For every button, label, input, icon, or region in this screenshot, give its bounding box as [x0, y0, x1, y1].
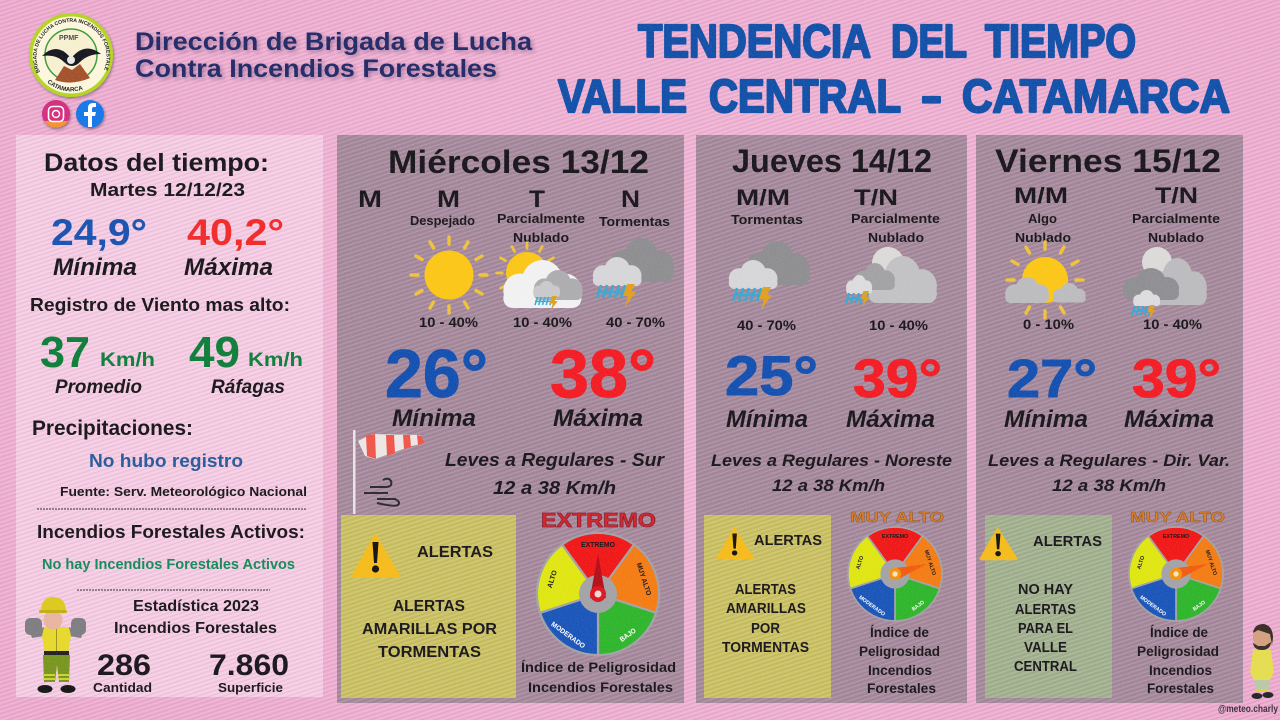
- icon: storm: [593, 238, 674, 307]
- fire count: 286: [97, 649, 151, 682]
- fire danger level: EXTREMO: [541, 510, 656, 532]
- icon: partly cloudy night: [1123, 247, 1207, 319]
- gauge caption: Incendios: [1149, 663, 1212, 678]
- wind gusts: Ráfagas: [211, 377, 285, 398]
- fire danger level: MUY ALTO: [1130, 509, 1225, 526]
- forecast minimum: Mínima: [726, 406, 808, 433]
- forecast minimum: 26°: [385, 336, 488, 412]
- gauge: fire danger: MUY ALTO: [1204, 549, 1218, 576]
- heading: day: Jueves 14/12: [732, 143, 932, 179]
- alert heading: ALERTAS: [754, 532, 822, 549]
- organisation name: Contra Incendios Forestales: [135, 55, 497, 83]
- alert text: AMARILLAS: [726, 601, 806, 617]
- alert text: CENTRAL: [1014, 659, 1077, 675]
- title: DEL: [891, 15, 967, 67]
- average wind: 37: [40, 328, 90, 377]
- alert text: PARA EL: [1018, 621, 1073, 637]
- rain probabilities: 0 - 10%: [1023, 316, 1075, 332]
- wind gusts: 49: [189, 328, 240, 377]
- period: afternoon, partly cloudy: Nublado: [513, 230, 569, 245]
- logo: brigade seal: CATAMARCA: [48, 80, 83, 92]
- icon: partly cloudy night: [846, 247, 937, 307]
- rain probabilities: 10 - 40%: [1143, 316, 1203, 332]
- period: afternoon and night: Nublado: [1148, 230, 1204, 245]
- gauge: fire danger: BAJO: [1192, 600, 1207, 613]
- active fires value: No hay Incendios Forestales Activos: [42, 557, 295, 573]
- heading: 2023 statistics: Estadística 2023: [133, 598, 259, 615]
- fire danger level: MUY ALTO: [850, 509, 944, 526]
- gauge: fire danger: ALTO: [547, 569, 559, 589]
- gauge: fire danger: [1129, 527, 1223, 621]
- observed maximum: [184, 212, 284, 281]
- fire count: [93, 649, 152, 695]
- alert heading: ALERTAS: [417, 544, 493, 561]
- period: afternoon and night: T/N: [854, 185, 898, 210]
- precipitation value: No hubo registro: [89, 451, 243, 471]
- forecast maximum: Máxima: [1124, 406, 1214, 433]
- forecast minimum: Mínima: [1004, 406, 1088, 433]
- wind forecast: Leves a Regulares - Dir. Var.: [988, 451, 1230, 470]
- gauge: fire danger: EXTREMO: [581, 542, 616, 549]
- date: Martes 12/12/23: [90, 180, 245, 200]
- period: morning and midday: Algo: [1028, 211, 1057, 226]
- forecast maximum: [846, 349, 942, 433]
- period: morning and midday: Tormentas: [731, 212, 803, 227]
- icon: sun: [411, 237, 487, 313]
- wind forecast: 12 a 38 Km/h: [1052, 476, 1166, 495]
- logo: brigade seal: PPMF: [59, 35, 79, 42]
- heading: active fires: Incendios Forestales Activos:: [37, 521, 305, 542]
- organisation name: [135, 28, 533, 83]
- observed minimum: 24,9°: [51, 212, 147, 253]
- title: VALLE: [558, 70, 687, 122]
- panel: friday forecast: [976, 135, 1243, 703]
- wind forecast: Leves a Regulares - Sur: [445, 450, 665, 470]
- gauge: fire danger: EXTREMO: [882, 534, 908, 540]
- rain probabilities: 10 - 40%: [869, 317, 929, 333]
- period: morning and midday: [731, 185, 803, 227]
- gauge caption: Índice de: [1150, 625, 1208, 640]
- icon: warning triangle: [352, 533, 400, 578]
- wind forecast: [445, 450, 665, 498]
- icon: sun with clouds: [1005, 242, 1086, 318]
- alert text: [722, 582, 809, 656]
- title: CENTRAL: [709, 70, 901, 122]
- period: afternoon and night: Parcialmente: [1132, 211, 1220, 226]
- gauge caption: [859, 625, 940, 696]
- period: morning and midday: [1014, 183, 1071, 245]
- gauge caption: Forestales: [867, 681, 936, 696]
- alert text: [1014, 582, 1077, 675]
- wind gusts: Km/h: [248, 350, 303, 371]
- title: [558, 15, 1230, 122]
- period: afternoon and night: [851, 185, 940, 245]
- logo: brigade seal: [28, 13, 116, 100]
- wind forecast: 12 a 38 Km/h: [493, 478, 616, 498]
- period: night, storms: [599, 186, 670, 229]
- heading: datos del tiempo: Datos del tiempo:: [44, 149, 269, 177]
- gauge caption: Incendios Forestales: [528, 679, 673, 695]
- gauge: fire danger: [848, 527, 942, 621]
- rain probabilities: 40 - 70%: [737, 317, 797, 333]
- gauge: fire danger: MODERADO: [1138, 595, 1167, 618]
- burned surface: Superficie: [218, 680, 283, 695]
- forecast maximum: Máxima: [846, 406, 935, 433]
- wind forecast: [988, 451, 1230, 495]
- alert box: [341, 515, 516, 698]
- gauge: fire danger: ALTO: [1136, 555, 1146, 570]
- forecast maximum: 39°: [1132, 349, 1221, 409]
- icon: forecaster avatar: [1250, 624, 1274, 699]
- period: midday, clear: Despejado: [410, 213, 475, 228]
- alert text: ALERTAS: [735, 582, 796, 598]
- gauge caption: Forestales: [1147, 681, 1214, 696]
- period: morning and midday: Nublado: [1015, 230, 1071, 245]
- gauge caption: Peligrosidad: [1137, 644, 1219, 659]
- alert text: AMARILLAS POR: [362, 621, 497, 638]
- period: morning and midday: M/M: [736, 185, 790, 210]
- rain probabilities: [1023, 316, 1203, 332]
- gauge caption: Incendios: [868, 663, 932, 678]
- wind gusts: [189, 328, 303, 398]
- alert text: [362, 598, 497, 661]
- gauge: fire danger: EXTREMO: [1163, 534, 1189, 540]
- forecast minimum: [1004, 349, 1097, 433]
- forecast minimum: [725, 344, 818, 433]
- panel: weather data: [16, 135, 323, 697]
- forecast minimum: 27°: [1007, 349, 1097, 409]
- observed maximum: Máxima: [184, 254, 273, 281]
- gauge caption: Índice de: [870, 625, 929, 640]
- alert text: TORMENTAS: [378, 644, 481, 661]
- rain probabilities: 10 - 40%: [419, 314, 479, 330]
- forecast minimum: 25°: [725, 344, 818, 407]
- rain probabilities: [419, 314, 666, 330]
- gauge caption: Peligrosidad: [859, 644, 940, 659]
- period: afternoon and night: Parcialmente: [851, 211, 940, 226]
- icon: instagram: [42, 100, 70, 128]
- gauge caption: [1137, 625, 1219, 696]
- period: morning and midday: M/M: [1014, 183, 1068, 208]
- wind forecast: [711, 451, 952, 495]
- fire count: Cantidad: [93, 680, 152, 695]
- gauge: fire danger: ALTO: [855, 555, 865, 570]
- period: morning: M: [358, 186, 382, 213]
- panel: thursday forecast: [696, 135, 967, 703]
- title: TIEMPO: [985, 15, 1136, 67]
- rain probabilities: [737, 317, 929, 333]
- gauge: fire danger: MODERADO: [549, 621, 586, 651]
- gauge: fire danger: MUY ALTO: [635, 562, 652, 597]
- heading: day: Viernes 15/12: [995, 143, 1221, 179]
- icon: facebook: [76, 100, 104, 128]
- organisation name: Dirección de Brigada de Lucha: [135, 28, 533, 56]
- rain probabilities: 40 - 70%: [606, 314, 666, 330]
- gauge: fire danger: BAJO: [619, 627, 638, 644]
- gauge: fire danger: [537, 533, 659, 655]
- alert text: POR: [751, 621, 780, 637]
- burned surface: 7.860: [209, 649, 289, 682]
- forecast maximum: [1124, 349, 1221, 433]
- alert text: NO HAY: [1018, 582, 1073, 598]
- gauge: fire danger: MODERADO: [857, 595, 886, 618]
- burned surface: [209, 649, 289, 695]
- heading: 2023 statistics: [114, 598, 277, 637]
- average wind: Promedio: [55, 377, 142, 398]
- observed minimum: [51, 212, 147, 281]
- heading: wind record: Registro de Viento mas alto:: [30, 294, 290, 315]
- period: night, storms: Tormentas: [599, 214, 670, 229]
- period: midday, clear: [410, 186, 475, 228]
- gauge caption: [521, 659, 676, 695]
- period: afternoon and night: [1132, 183, 1220, 245]
- period: midday, clear: M: [437, 186, 460, 213]
- icon: windsock: [353, 430, 425, 514]
- wind forecast: 12 a 38 Km/h: [772, 476, 885, 495]
- period: afternoon and night: T/N: [1155, 183, 1198, 208]
- heading: precipitation: Precipitaciones:: [32, 417, 193, 440]
- observed minimum: Mínima: [53, 254, 137, 281]
- alert box: [704, 515, 831, 698]
- alert text: ALERTAS: [1015, 602, 1076, 618]
- alert text: TORMENTAS: [722, 640, 809, 656]
- gauge caption: Índice de Peligrosidad: [521, 659, 676, 675]
- icon: warning triangle: [717, 527, 753, 559]
- gauge: fire danger: MUY ALTO: [923, 549, 937, 576]
- title: -: [921, 70, 942, 122]
- period: night, storms: N: [621, 186, 640, 213]
- forecast maximum: Máxima: [553, 405, 643, 432]
- period: afternoon, partly cloudy: [497, 186, 585, 245]
- icon: firefighter: [25, 597, 86, 693]
- average wind: [40, 328, 155, 398]
- gauge: fire danger: BAJO: [911, 600, 926, 613]
- icon: wind lines: [364, 479, 399, 506]
- wind forecast: Leves a Regulares - Noreste: [711, 451, 952, 470]
- title: TENDENCIA: [638, 15, 871, 67]
- icon: storm: [729, 241, 810, 310]
- icon: sun with cloud and storm: [497, 243, 583, 310]
- alert text: ALERTAS: [393, 598, 465, 615]
- alert box: [980, 515, 1112, 698]
- period: afternoon and night: Nublado: [868, 230, 924, 245]
- observed maximum: 40,2°: [187, 212, 284, 253]
- period: afternoon, partly cloudy: Parcialmente: [497, 211, 585, 226]
- rain probabilities: 10 - 40%: [513, 314, 573, 330]
- heading: 2023 statistics: Incendios Forestales: [114, 620, 277, 637]
- alert text: VALLE: [1024, 640, 1067, 656]
- panel: wednesday forecast: [337, 135, 684, 703]
- icon: warning triangle: [980, 527, 1017, 560]
- heading: day: Miércoles 13/12: [388, 144, 649, 180]
- title: CATAMARCA: [962, 70, 1230, 122]
- forecast minimum: Mínima: [392, 405, 476, 432]
- forecast maximum: 38°: [550, 336, 656, 412]
- source: Fuente: Serv. Meteorológico Nacional: [60, 484, 307, 499]
- alert heading: ALERTAS: [1033, 533, 1102, 550]
- average wind: Km/h: [100, 350, 155, 371]
- period: afternoon, partly cloudy: T: [529, 186, 545, 213]
- forecast maximum: 39°: [853, 349, 942, 409]
